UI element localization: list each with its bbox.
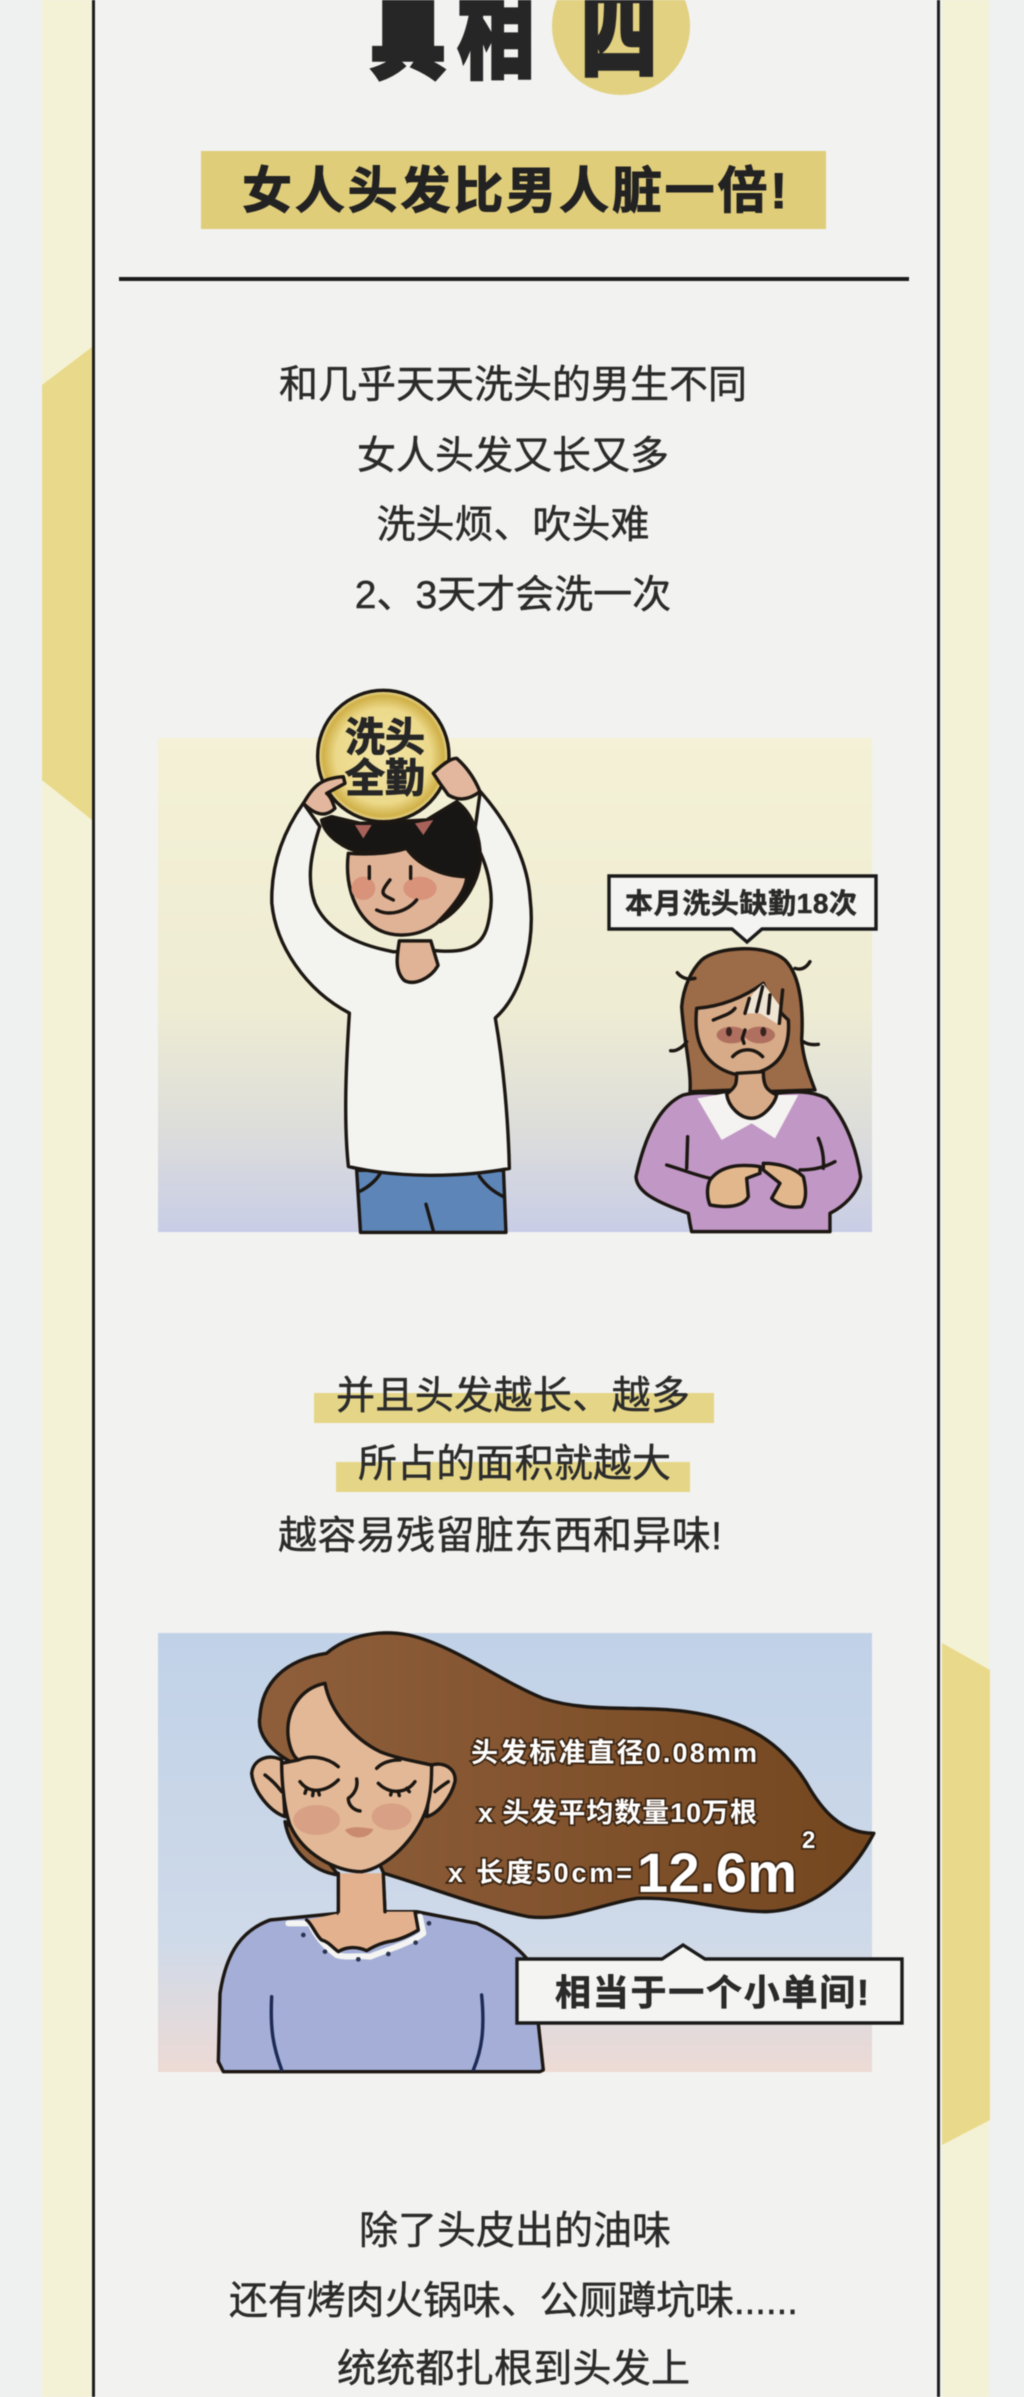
hair text: area formula: x 头发平均数量10万根 — [478, 1798, 757, 1828]
coin text: 洗头 — [345, 716, 425, 760]
highlighted text block: 并且头发越长、越多 — [336, 1375, 690, 1418]
illustration: flowing hair — [259, 1633, 874, 1917]
coin text — [345, 716, 425, 801]
illustration: man head, hands and coin — [303, 690, 480, 935]
hair text: area formula: 2 — [802, 1827, 815, 1854]
text block: closing: 除了头皮出的油味 — [359, 2210, 671, 2253]
title: 真相四 — [370, 0, 690, 95]
hair text: area formula: 12.6m — [637, 1841, 797, 1904]
speech bubble: 相当于一个小单间! — [517, 1945, 902, 2023]
speech bubble: 本月洗头缺勤18次 — [609, 876, 876, 942]
highlighted text block: 所占的面积就越大 — [358, 1443, 671, 1486]
hair text: area formula — [448, 1738, 815, 1904]
illustration: man body — [272, 792, 531, 1232]
hair text: area formula: 头发标准直径0.08mm — [471, 1738, 757, 1768]
highlighted text block — [278, 1375, 722, 1558]
speech bubble: 本月洗头缺勤18次: 本月洗头缺勤18次 — [625, 888, 857, 919]
illustration: sad woman — [636, 949, 861, 1232]
divider — [119, 277, 909, 281]
text block: closing: 还有烤肉火锅味、公厕蹲坑味...... — [229, 2280, 798, 2323]
subtitle banner: 女人头发比男人脏一倍! — [242, 163, 787, 219]
speech bubble: 相当于一个小单间!: 相当于一个小单间! — [555, 1972, 869, 2013]
text block: intro: 女人头发又长又多 — [357, 435, 669, 478]
highlighted text block: 越容易残留脏东西和异味! — [278, 1515, 722, 1558]
text block: intro: 洗头烦、吹头难 — [376, 504, 650, 547]
text block: intro: 和几乎天天洗头的男生不同 — [279, 364, 747, 407]
illustration: woman face — [252, 1683, 455, 1915]
panel: woman with flowing hair — [158, 1633, 902, 2072]
hair text: area formula: x 长度50cm= — [448, 1858, 632, 1888]
coin text: 全勤 — [345, 757, 425, 801]
panel: man with coin and woman with speech bubble — [158, 690, 876, 1232]
subtitle banner — [201, 151, 826, 229]
text block: intro: 2、3天才会洗一次 — [355, 574, 671, 617]
text block: intro — [279, 364, 747, 617]
illustration: shoulders and collar — [218, 1880, 543, 2072]
text block: closing — [229, 2210, 798, 2391]
text block: closing: 统统都扎根到头发上 — [337, 2348, 690, 2391]
